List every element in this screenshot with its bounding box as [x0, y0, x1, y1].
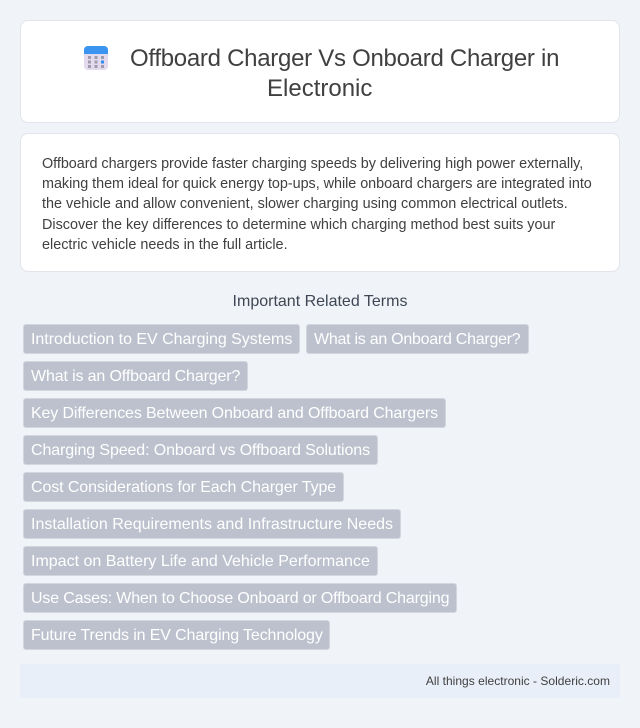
intro paragraph: making them ideal for quick energy top-ups, while onboard chargers are integrated into [42, 176, 592, 192]
tag: Impact on Battery Life and Vehicle Performance [31, 553, 370, 570]
tag: Introduction to EV Charging Systems [31, 331, 292, 348]
icon: calendar grid [84, 46, 108, 70]
tag [23, 472, 344, 502]
footer credit: All things electronic - Solderic.com [426, 674, 610, 688]
title: Offboard Charger Vs Onboard Charger in [130, 45, 559, 72]
tag: What is an Offboard Charger? [31, 368, 240, 385]
panel: intro text [20, 133, 620, 272]
tag: Key Differences Between Onboard and Offboard Chargers [31, 405, 438, 422]
title: Electronic [267, 75, 372, 102]
tag: Use Cases: When to Choose Onboard or Offboard Charging [31, 590, 449, 607]
tag [23, 546, 378, 576]
tag [306, 324, 529, 354]
tag [23, 583, 457, 613]
panel: term tags [23, 324, 529, 650]
intro paragraph: the vehicle and allow convenient, slower charging using common electrical outlets. [42, 196, 568, 212]
tag: Future Trends in EV Charging Technology [31, 627, 323, 644]
tag [23, 509, 401, 539]
tag [23, 620, 330, 650]
intro paragraph: Offboard chargers provide faster charging speeds by delivering high power externally, [42, 156, 583, 172]
tag [23, 398, 446, 428]
intro paragraph [42, 156, 592, 253]
tag: Installation Requirements and Infrastructure Needs [31, 516, 393, 533]
tag: What is an Onboard Charger? [314, 331, 520, 348]
intro paragraph: electric vehicle needs in the full article. [42, 237, 288, 253]
intro paragraph: Discover the key differences to determine which charging method best suits your [42, 217, 555, 233]
footer bar [20, 664, 620, 698]
heading: important related terms: Important Related Terms [233, 293, 407, 310]
panel: title card [20, 20, 620, 123]
tag [23, 435, 378, 465]
title [130, 45, 559, 102]
tag: Charging Speed: Onboard vs Offboard Solutions [31, 442, 370, 459]
tag [23, 361, 248, 391]
tag [23, 324, 300, 354]
tag: Cost Considerations for Each Charger Type [31, 479, 336, 496]
